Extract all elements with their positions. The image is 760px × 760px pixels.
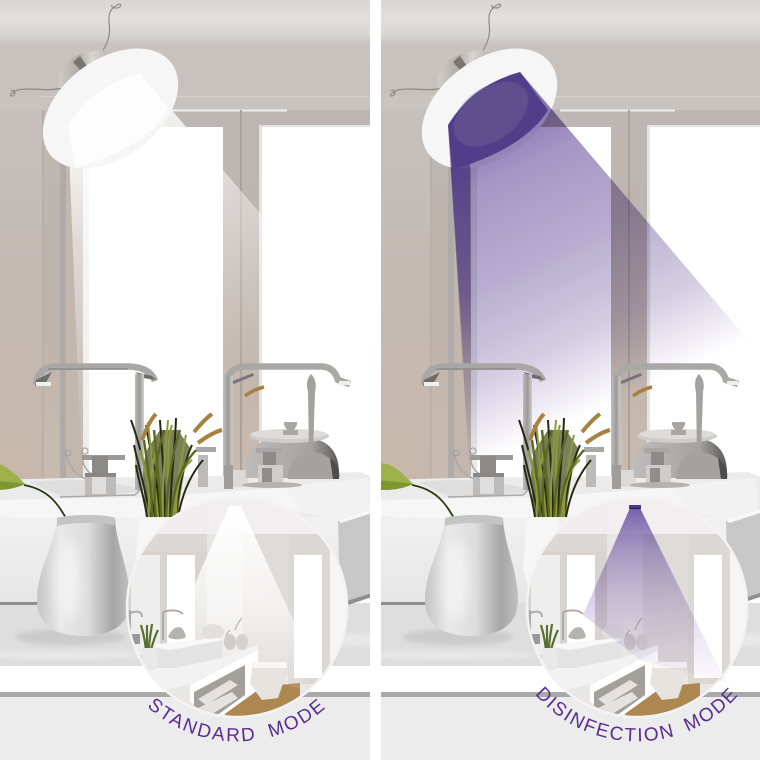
basin and counter (358, 472, 760, 760)
inset vanity (530, 610, 687, 716)
basin and counter (0, 472, 390, 760)
downlight housing (58, 50, 106, 88)
inset: standard mode room (126, 503, 348, 716)
green flower bud (378, 464, 454, 518)
inset ceiling fixture (629, 505, 641, 509)
panel: standard mode (0, 0, 390, 760)
downlight wires (390, 4, 501, 96)
violet light beam (448, 72, 748, 480)
inset room (520, 490, 755, 730)
downlight violet opening (448, 72, 548, 170)
faucet right (612, 366, 738, 489)
inset white light cone (190, 506, 305, 690)
inset: disinfection mode room (520, 490, 755, 730)
panel: disinfection mode (358, 0, 760, 760)
kettle and brush (246, 374, 339, 479)
downlight housing (438, 50, 486, 87)
white vase (425, 515, 518, 636)
white vase (37, 515, 130, 636)
green flower bud (0, 464, 66, 518)
faucet left (423, 366, 544, 490)
plant pot (136, 542, 146, 560)
caption: standard mode: STANDARD MODE (148, 698, 325, 742)
downlight trim ring (42, 48, 178, 168)
inset room (128, 503, 346, 716)
white light beam (70, 110, 262, 414)
faucet right (224, 366, 350, 489)
room wall and windows (0, 0, 375, 494)
room wall and windows (378, 0, 760, 494)
grass plant (519, 387, 652, 517)
faucet left (35, 366, 156, 490)
downlight inner lens (454, 82, 528, 146)
grass plant (131, 387, 264, 517)
faucet right handle (196, 447, 302, 488)
faucet right handle (584, 447, 690, 488)
caption: disinfection mode: DISINFECTION MODE (536, 686, 738, 742)
kettle and brush (634, 374, 727, 479)
downlight wires (10, 4, 121, 96)
downlight glowing opening (68, 73, 168, 168)
downlight trim ring (422, 48, 558, 168)
inset vanity (130, 610, 287, 716)
beam edge over window frame (451, 160, 471, 380)
plant pot (523, 542, 546, 584)
faucet left handle (448, 448, 528, 497)
faucet left handle (60, 448, 140, 497)
inset violet light beam (583, 508, 726, 682)
